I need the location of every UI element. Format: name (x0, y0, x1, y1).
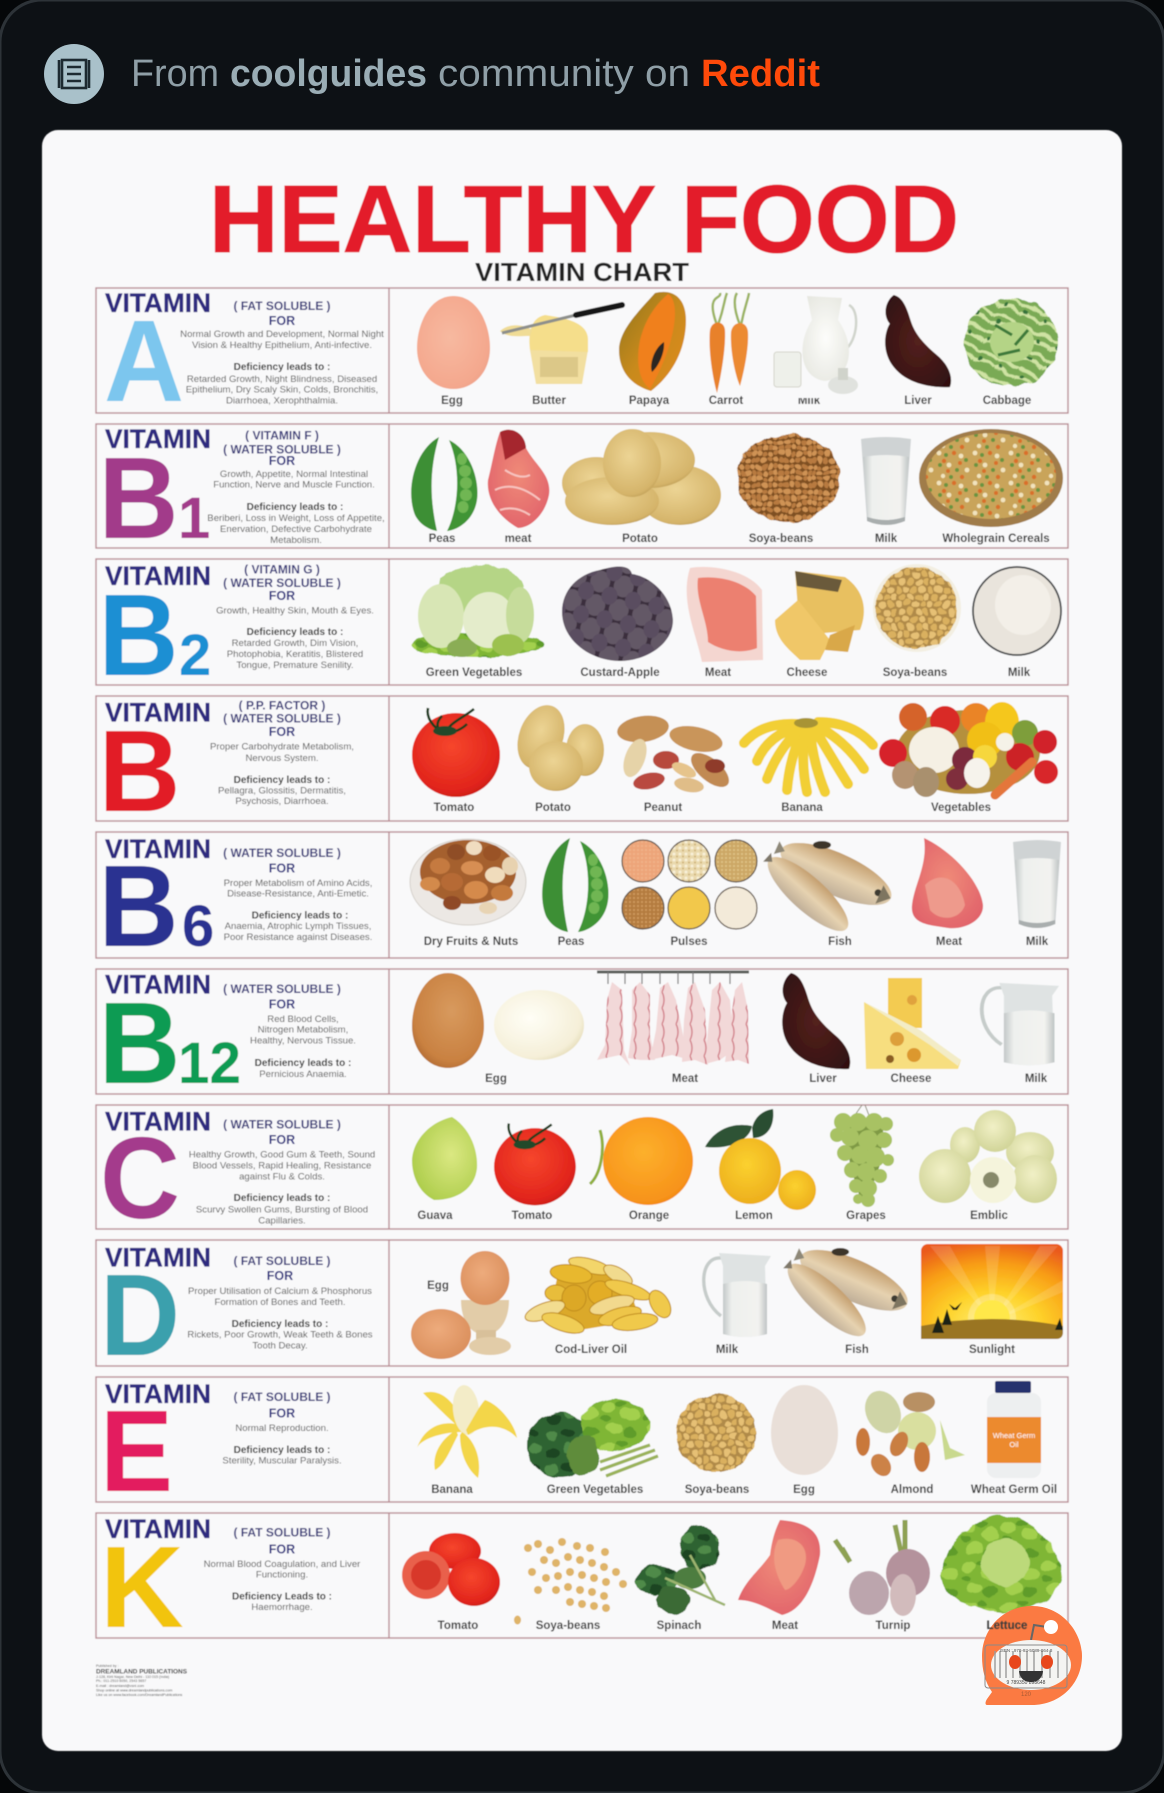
icon: guava: Guava (417, 1210, 453, 1222)
icon: lettuce (941, 1515, 1062, 1613)
icon: soya beans bowl: Soya-beans (883, 667, 947, 679)
vitamin B2 info: FOR (269, 589, 295, 603)
icon: turnips: Turnip (876, 1620, 910, 1632)
vitamin B6 info: 6 (182, 894, 214, 959)
publisher credit: DREAMLAND PUBLICATIONS (96, 1670, 187, 1676)
vitamin B1 info: VITAMIN (105, 424, 211, 454)
vitamin C info: VITAMIN (105, 1106, 211, 1136)
subtitle: VITAMIN CHART (475, 257, 689, 287)
icon: lemon: Lemon (735, 1210, 773, 1222)
icon: community badge (44, 44, 104, 104)
snoo face (1009, 1655, 1053, 1682)
vitamin B2 info: ( VITAMIN G ) (244, 562, 320, 576)
icon: white egg: Egg (793, 1484, 815, 1496)
vitamin C info: C (100, 1113, 180, 1243)
vitamin B2 info: B (98, 570, 178, 700)
icon: milk bowl: Milk (1008, 667, 1031, 679)
icon: meat slice (738, 1520, 820, 1632)
vitamin B1 info: Beriberi, Loss in Weight, Loss of Appetite, (207, 513, 385, 524)
icon: wheat germ oil bottle (971, 1381, 1057, 1496)
vitamin K info: Deficiency Leads to : (232, 1592, 332, 1602)
vitamin B12 info: Red Blood Cells, (267, 1014, 339, 1025)
icon: soya beans bowl (873, 564, 961, 679)
vitamin D info (100, 1242, 373, 1380)
panel: vitamin B1 (96, 424, 1068, 563)
icon: papaya (619, 292, 686, 407)
icon: orange (590, 1117, 693, 1222)
icon: milk glass: Milk (875, 533, 898, 545)
icon: pulses: Pulses (670, 936, 708, 948)
vitamin B6 info: VITAMIN (105, 834, 211, 864)
vitamin B1 info: Growth, Appetite, Normal Intestinal (220, 469, 368, 480)
icon: wholegrain cereals (919, 429, 1063, 545)
icon: meat: meat (505, 533, 532, 545)
vitamin B6 info: Proper Metabolism of Amino Acids, (224, 878, 372, 889)
panel: vitamin B2 (96, 559, 1068, 700)
vitamin A info: Epithelium, Dry Scaly Skin, Colds, Bronchitis, (186, 384, 378, 396)
vitamin E info: VITAMIN (105, 1379, 211, 1409)
vitamin B info: ( P.P. FACTOR ) (239, 698, 325, 712)
label: lettuce: Lettuce (987, 1620, 1027, 1632)
vitamin B6 info: Disease-Resistance, Anti-Emetic. (227, 888, 369, 900)
vitamin B2 info: Photophobia, Keratitis, Blistered (227, 649, 363, 660)
icon: hanging meat (597, 972, 749, 1085)
label: liver: Liver (904, 395, 932, 407)
vitamin D info: Proper Utilisation of Calcium & Phosphorus (188, 1286, 372, 1297)
vitamin B12 info: FOR (269, 998, 295, 1012)
vitamin E info (100, 1379, 342, 1516)
vitamin A info: Deficiency leads to : (234, 362, 330, 373)
vitamin B12 info: Deficiency leads to : (255, 1058, 351, 1069)
icon: peanuts (615, 713, 735, 814)
icon: cod liver oil capsules: Cod-Liver Oil (555, 1344, 627, 1356)
vitamin A info: Vision & Healthy Epithelium, Anti-infective. (192, 340, 372, 351)
vitamin B1 info: Deficiency leads to : (247, 502, 343, 513)
icon: brown egg (412, 973, 484, 1068)
vitamin B6 info: ( WATER SOLUBLE ) (223, 846, 341, 860)
vitamin E info: Deficiency leads to : (234, 1445, 330, 1456)
vitamin B info: Psychosis, Diarrhoea. (235, 796, 329, 807)
vitamin B2 info: ( WATER SOLUBLE ) (223, 576, 341, 590)
vitamin A info: VITAMIN (105, 288, 211, 318)
vitamin K info (100, 1514, 361, 1652)
icon: cod liver oil capsules (523, 1254, 675, 1356)
icon: green vegetables mix (527, 1399, 658, 1496)
vitamin K info: ( FAT SOLUBLE ) (233, 1526, 331, 1540)
vitamin B1 info: 1 (178, 486, 210, 551)
vitamin D info: Tooth Decay. (252, 1340, 308, 1352)
icon: white egg (771, 1385, 838, 1496)
icon: lemon (705, 1109, 816, 1222)
icon: cheese wedge (864, 978, 961, 1085)
vitamin E info: Normal Reproduction. (235, 1423, 329, 1434)
vitamin B6 info: FOR (269, 862, 295, 876)
barcode seen through the badge (985, 1645, 1067, 1698)
icon: green vegetables: Green Vegetables (426, 667, 522, 679)
vitamin B info: Proper Carbohydrate Metabolism, (210, 742, 354, 752)
icon: fish: Fish (828, 936, 852, 948)
publisher credit: Published by : (96, 1664, 119, 1668)
icon: fish: Fish (845, 1344, 869, 1356)
vitamin C info (100, 1106, 375, 1243)
vitamin B1 info: B (98, 433, 178, 563)
vitamin B info: VITAMIN (105, 698, 211, 728)
icon: soya beans (676, 1394, 756, 1496)
icon: potatoes: Potato (622, 533, 658, 545)
vitamin B12 info: Healthy, Nervous Tissue. (250, 1036, 356, 1046)
icon: dry fruits and nuts (410, 839, 526, 948)
vitamin C info: Blood Vessels, Rapid Healing, Resistance (193, 1160, 371, 1172)
icon: dry fruits and nuts: Dry Fruits & Nuts (424, 936, 518, 948)
vitamin K info: FOR (269, 1542, 295, 1556)
icon: milk jug: Milk (1025, 1073, 1048, 1085)
vitamin E info: E (100, 1386, 173, 1516)
header: source line (44, 44, 820, 104)
icon: eggs in cup (411, 1251, 511, 1359)
vitamin E info: ( FAT SOLUBLE ) (233, 1390, 331, 1404)
panel: vitamin B12 (96, 969, 1068, 1108)
vitamin A info: ( FAT SOLUBLE ) (233, 299, 331, 313)
vitamin B2 info (98, 561, 374, 700)
vitamin B12 info: ( WATER SOLUBLE ) (223, 982, 341, 996)
icon: liver (782, 973, 850, 1069)
vitamin D info: D (100, 1250, 180, 1380)
publisher credit: E-mail : dreamland@vsnl.com (96, 1684, 144, 1688)
vitamin A info: Normal Growth and Development, Normal Night (180, 329, 384, 340)
source text: From (131, 53, 219, 95)
vitamin B1 info: ( VITAMIN F ) (245, 428, 319, 442)
vitamin C info: FOR (269, 1133, 295, 1147)
icon: tomatoes (402, 1533, 500, 1632)
barcode seen through the badge: ISBN : 978-93-5089-864-8 (1000, 1648, 1053, 1653)
publisher credit: Shop online at www.dreamlandpublications.com (96, 1688, 172, 1692)
icon: cheese (775, 571, 864, 679)
vitamin B2 info: Tongue, Premature Senility. (236, 660, 354, 671)
icon: custard apple: Custard-Apple (580, 667, 660, 679)
icon: milk glass (1013, 840, 1061, 948)
icon: liver (885, 295, 951, 387)
icon: milk glass (861, 437, 911, 545)
icon: meat steak: Meat (705, 667, 731, 679)
vitamin D info: VITAMIN (105, 1242, 211, 1272)
vitamin B info: Deficiency leads to : (234, 775, 330, 786)
vitamin B6 info: Deficiency leads to : (252, 910, 348, 922)
icon: papaya: Papaya (629, 395, 670, 407)
title: HEALTHY FOOD (209, 166, 959, 273)
publisher credit (96, 1664, 187, 1697)
panel: vitamin B (P.P. factor) (96, 696, 1068, 836)
vitamin C info: against Flu & Colds. (239, 1172, 325, 1182)
vitamin B1 info: Metabolism. (270, 535, 322, 546)
vitamin B6 info: B (98, 841, 178, 971)
icon: sunlight scene: Sunlight (969, 1344, 1015, 1356)
icon: custard apple (562, 567, 673, 679)
icon: scattered soya beans: Soya-beans (536, 1620, 600, 1632)
publisher credit: Like us on www.facebook.com/DreamlandPublications (96, 1693, 182, 1697)
vitamin B2 info: Deficiency leads to : (247, 627, 343, 638)
icon: cabbage (964, 298, 1058, 407)
vitamin B2 info: Growth, Healthy Skin, Mouth & Eyes. (216, 606, 374, 616)
vitamin B2 info: 2 (179, 623, 211, 688)
icon: meat (488, 430, 549, 545)
vitamin B info: B (98, 706, 180, 836)
icon: grapes: Grapes (846, 1210, 886, 1222)
icon: milk glass: Milk (1026, 936, 1049, 948)
panel: vitamin C (96, 1105, 1068, 1243)
vitamin B info: Pellagra, Glossitis, Dermatitis, (218, 786, 346, 796)
vitamin A info: Diarrhoea, Xerophthalmia. (226, 396, 338, 406)
barcode seen through the badge: 9 789350 898648 (1007, 1680, 1046, 1686)
icon: pulses (622, 840, 757, 948)
icon: mixed vegetables (879, 702, 1058, 814)
vitamin B6 info: Poor Resistance against Diseases. (224, 932, 372, 943)
vitamin B1 info: Enervation, Defective Carbohydrate (220, 524, 372, 535)
vitamin C info: ( WATER SOLUBLE ) (223, 1118, 341, 1132)
icon: meat slice: Meat (772, 1620, 798, 1632)
icon: potatoes small: Potato (535, 802, 571, 814)
vitamin C info: Capillaries. (258, 1216, 306, 1226)
icon: peas (542, 838, 609, 948)
icon: green vegetables mix: Green Vegetables (547, 1484, 643, 1496)
icon: peas: Peas (558, 936, 584, 948)
icon: peas: Peas (429, 533, 455, 545)
icon: peeled banana (417, 1384, 517, 1496)
icon: soya beans brown (736, 434, 840, 545)
icon: turnips (835, 1520, 930, 1632)
vitamin B1 info (98, 424, 385, 563)
vitamin B2 info: VITAMIN (105, 561, 211, 591)
icon: meat cut: Meat (936, 936, 962, 948)
vitamin B info: ( WATER SOLUBLE ) (223, 712, 341, 726)
vitamin A info: FOR (269, 314, 295, 328)
icon: sunlight scene (921, 1244, 1063, 1356)
label: liver: Liver (809, 1073, 837, 1085)
vitamin B info (98, 698, 354, 836)
vitamin B12 info: VITAMIN (105, 970, 211, 1000)
publisher credit: J-128, Kirti Nagar, New Delhi - 110 015 (India) (96, 1675, 169, 1679)
icon: white egg with label: Egg (485, 1073, 507, 1085)
icon: almonds (856, 1385, 965, 1496)
vitamin A info (104, 288, 384, 426)
icon: milk jug and glass: Milk (798, 395, 821, 407)
vitamin B12 info: Pernicious Anaemia. (259, 1069, 347, 1080)
panel: vitamin A (96, 288, 1068, 426)
icon: milk jug and glass (774, 296, 858, 407)
vitamin B1 info: FOR (269, 454, 295, 468)
vitamin B12 info: Nitrogen Metabolism, (258, 1024, 348, 1036)
icon: guava (412, 1117, 477, 1222)
icon: cheese: Cheese (787, 667, 827, 679)
icon: scattered soya beans (514, 1538, 627, 1632)
label: tomato: Tomato (512, 1210, 552, 1222)
vitamin D info: ( FAT SOLUBLE ) (233, 1254, 331, 1268)
vitamin C info: Healthy Growth, Good Gum & Teeth, Sound (189, 1150, 375, 1160)
icon: spinach (636, 1526, 725, 1632)
icon: peas (411, 437, 478, 545)
icon: meat cut (912, 838, 983, 948)
source text (131, 53, 820, 95)
icon: spinach: Spinach (657, 1620, 701, 1632)
vitamin B12 info: B (98, 978, 180, 1108)
vitamin E info: FOR (269, 1406, 295, 1420)
icon: tomatoes: Tomato (438, 1620, 478, 1632)
icon: butter: Butter (532, 395, 566, 407)
icon: milk bowl (973, 567, 1061, 679)
vitamin D info: FOR (267, 1269, 293, 1283)
icon: potatoes (562, 429, 721, 545)
icon: tomato (412, 708, 500, 797)
vitamin K info: Normal Blood Coagulation, and Liver (204, 1559, 361, 1570)
vitamin B6 info (98, 834, 372, 971)
vitamin A info: Retarded Growth, Night Blindness, Diseased (187, 374, 377, 385)
icon: almonds: Almond (891, 1484, 933, 1496)
barcode seen through the badge: 120 (1021, 1692, 1032, 1698)
icon: eggs in cup: Egg (427, 1280, 449, 1292)
source text: Reddit (701, 53, 820, 95)
icon: egg (417, 296, 490, 407)
vitamin B2 info: Retarded Growth, Dim Vision, (232, 638, 358, 649)
vitamin B1 info: ( WATER SOLUBLE ) (223, 442, 341, 456)
icon: emblic: Emblic (970, 1210, 1008, 1222)
icon: bananas (744, 718, 873, 814)
publisher credit: Ph.: 011-2510 6050, 2543 5657 (96, 1679, 146, 1683)
icon: fish (776, 1236, 915, 1356)
vitamin D info: Deficiency leads to : (232, 1319, 328, 1330)
icon: bananas: Banana (781, 802, 823, 814)
icon: cabbage: Cabbage (983, 395, 1031, 407)
icon: emblic (919, 1110, 1057, 1222)
vitamin B6 info: Anaemia, Atrophic Lymph Tissues, (225, 921, 371, 932)
vitamin C info: Deficiency leads to : (234, 1193, 330, 1204)
icon: wheat germ oil bottle: Wheat Germ (993, 1431, 1035, 1440)
vitamin E info: Sterility, Muscular Paralysis. (222, 1456, 342, 1466)
vitamin K info: VITAMIN (105, 1514, 211, 1544)
vitamin B12 info: 12 (178, 1031, 241, 1096)
icon: orange: Orange (629, 1210, 669, 1222)
icon: wholegrain cereals: Wholegrain Cereals (942, 533, 1050, 545)
icon: carrot (709, 293, 749, 407)
panel: vitamin K (96, 1513, 1068, 1652)
icon: green vegetables (411, 565, 545, 679)
source text: coolguides (230, 53, 427, 95)
vitamin B12 info (98, 970, 356, 1108)
icon: milk jug: Milk (716, 1344, 739, 1356)
vitamin B info: Nervous System. (245, 753, 319, 764)
vitamin D info: Rickets, Poor Growth, Weak Teeth & Bones (187, 1330, 373, 1340)
icon: hanging meat: Meat (672, 1073, 698, 1085)
icon: peeled banana: Banana (431, 1484, 473, 1496)
vitamin K info: Haemorrhage. (251, 1602, 313, 1613)
panel: vitamin D (96, 1236, 1068, 1380)
icon: soya beans: Soya-beans (685, 1484, 749, 1496)
icon: potatoes small (509, 698, 604, 814)
icon: wheat germ oil bottle: Wheat Germ Oil (971, 1484, 1057, 1496)
icon: peanuts: Peanut (644, 802, 682, 814)
icon: reddit mascot badge (982, 1606, 1082, 1705)
vitamin A info: A (104, 296, 184, 426)
icon: milk jug (704, 1253, 771, 1356)
panel: vitamin B6 (96, 828, 1068, 971)
icon: grapes (830, 1105, 894, 1222)
icon: carrot: Carrot (709, 395, 743, 407)
icon: butter (500, 305, 622, 407)
vitamin D info: Formation of Bones and Teeth. (214, 1297, 346, 1308)
source text: community on (438, 53, 690, 95)
vitamin B info: FOR (269, 725, 295, 739)
icon: tomato (494, 1124, 576, 1205)
vitamin B1 info: Function, Nerve and Muscle Function. (213, 480, 375, 490)
icon: egg: Egg (441, 395, 463, 407)
icon: cheese wedge: Cheese (891, 1073, 931, 1085)
vitamin K info: Functioning. (256, 1570, 308, 1580)
icon: soya beans brown: Soya-beans (749, 533, 813, 545)
icon: milk jug (982, 983, 1059, 1085)
icon: wheat germ oil bottle: Oil (1009, 1440, 1019, 1449)
panel: vitamin E (96, 1377, 1068, 1516)
icon: mixed vegetables: Vegetables (931, 802, 991, 814)
icon: meat steak (687, 567, 763, 679)
icon: white egg with label (485, 990, 584, 1085)
vitamin C info: Scurvy Swollen Gums, Bursting of Blood (196, 1204, 368, 1216)
icon: fish (756, 828, 899, 948)
label: tomato: Tomato (434, 802, 474, 814)
vitamin K info: K (100, 1522, 184, 1652)
